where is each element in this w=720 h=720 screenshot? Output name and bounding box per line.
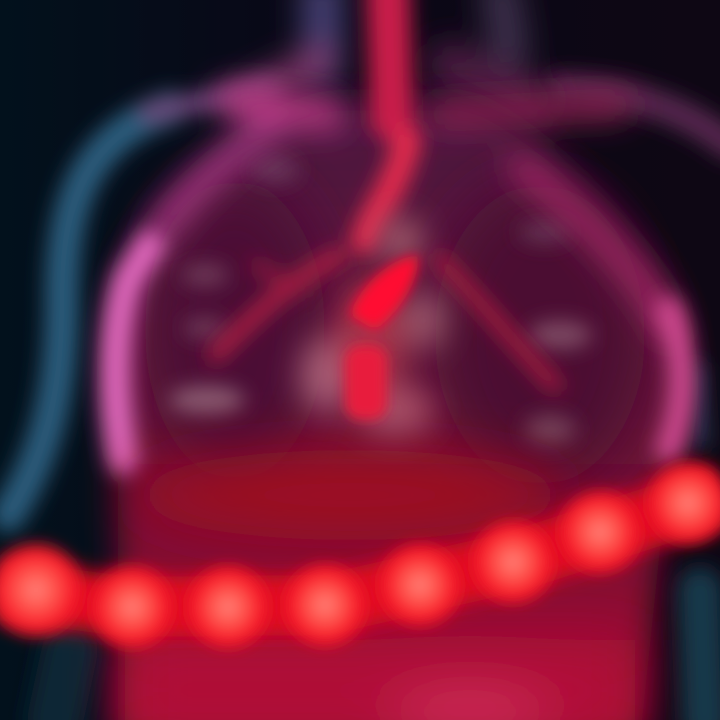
torso body (107, 100, 687, 720)
bead 6 (465, 514, 561, 610)
bead 8 (640, 455, 720, 551)
bead 1 (0, 536, 90, 644)
trachea and bronchi (215, 0, 555, 385)
right lung bright edge (668, 310, 682, 450)
neck (250, 0, 530, 100)
bead 3 (180, 559, 276, 655)
bead 4 (277, 557, 373, 653)
bead 7 (552, 484, 648, 580)
torso pink edges (160, 100, 670, 330)
heart core (301, 218, 445, 435)
lower chest red (125, 450, 635, 720)
glowing red band (0, 455, 720, 655)
lungs (145, 180, 645, 485)
left lung bright edge (115, 245, 150, 460)
bead 5 (372, 537, 468, 633)
bead 2 (84, 559, 180, 655)
lung highlights (169, 157, 592, 445)
heart bright red (345, 255, 418, 420)
